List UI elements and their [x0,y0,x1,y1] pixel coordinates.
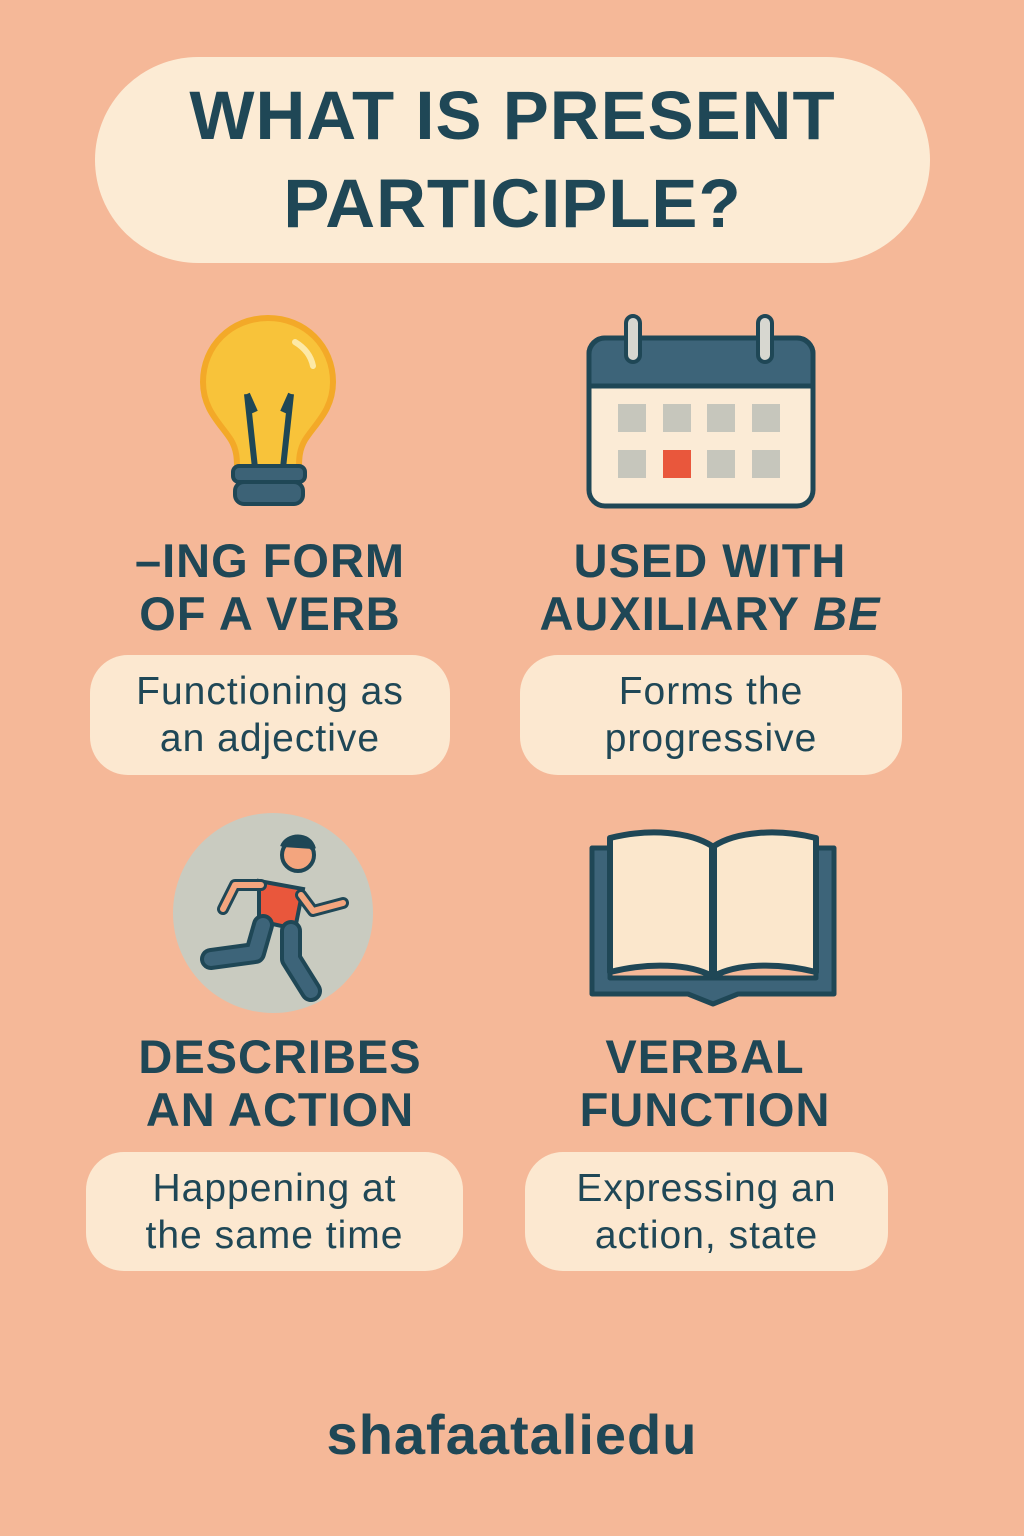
pill: forms the progressive [520,655,902,775]
pill: functioning as adjective [90,655,450,775]
pill: forms the progressive: Forms the [619,670,803,713]
heading: ing form: OF A VERB [139,587,401,640]
pill: forms the progressive: progressive [605,717,817,760]
footer: shafaataliedu [327,1403,697,1466]
heading: describes an action: DESCRIBES [138,1030,422,1083]
pill: expressing an action, state: action, state [595,1214,818,1256]
heading: verbal function [580,1030,830,1136]
pill: expressing an action, state: Expressing an [576,1166,837,1210]
heading: ing form [135,534,405,640]
heading: verbal function: VERBAL [605,1030,805,1083]
icon: runner [173,813,373,1013]
heading: used with auxiliary be: AUXILIARY BE [539,587,881,640]
heading: ing form: –ING FORM [135,534,405,587]
heading: used with auxiliary be: USED WITH [574,534,846,587]
pill: happening at the same time: the same time [146,1214,403,1256]
title: PARTICIPLE? [283,165,742,242]
title [95,57,930,263]
pill: expressing an action, state [525,1152,888,1271]
icon: calendar [586,314,816,508]
heading: describes an action [138,1030,422,1136]
pill: happening at the same time: Happening at [152,1166,397,1210]
heading: describes an action: AN ACTION [146,1083,414,1136]
pill: functioning as adjective: Functioning as [136,670,404,713]
pill: functioning as adjective: an adjective [160,717,380,760]
heading: used with auxiliary be [539,534,881,640]
title: WHAT IS PRESENT [189,77,836,154]
pill: happening at the same time [86,1152,463,1271]
icon: light bulb [200,315,336,506]
heading: verbal function: FUNCTION [580,1083,830,1136]
icon: open book [590,829,836,1006]
